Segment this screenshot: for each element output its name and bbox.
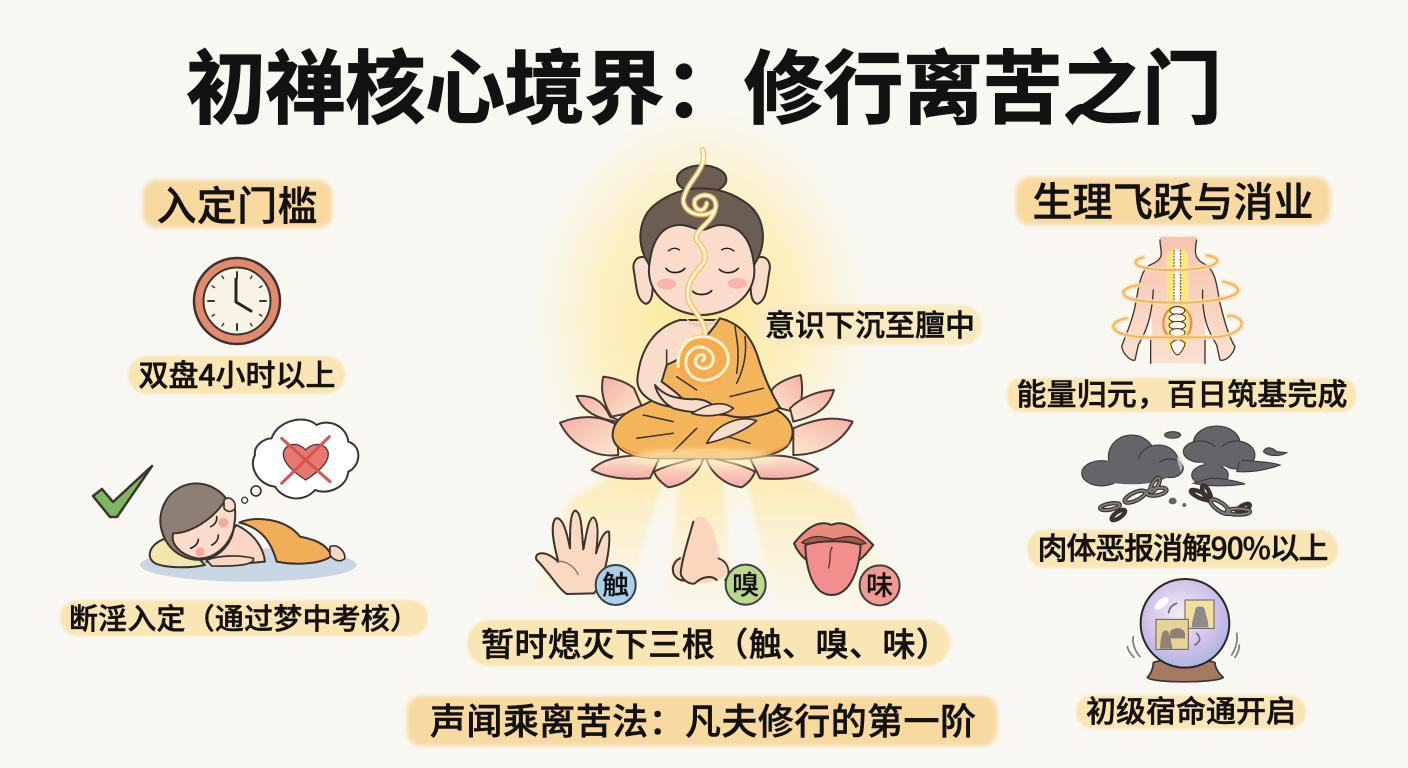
torso [637, 320, 727, 413]
ears [633, 257, 770, 304]
icon: dark clouds and broken chains [1082, 426, 1287, 522]
icon: spine with energy rings [1113, 237, 1242, 363]
icon: mouth and tongue: 味 [866, 564, 893, 603]
crossed foot [707, 419, 757, 443]
panel: physiological leap [1007, 170, 1356, 731]
central glow [525, 103, 905, 615]
panel: central figure [407, 150, 997, 746]
thought bubble [242, 420, 358, 503]
robe [239, 519, 332, 564]
icon: hand [536, 511, 636, 605]
shoulder [207, 525, 265, 565]
icon: mouth and tongue [794, 523, 900, 605]
title: 初禅核心境界：修行离苦之门 [186, 25, 1222, 141]
facial features [666, 248, 738, 294]
icon: sleeping monk with thought bubble [140, 420, 358, 582]
glow under legs [630, 449, 777, 468]
icon: check mark [93, 466, 152, 517]
label: extinguish lower three roots: 暂时熄灭下三根（触、嗅、味） [481, 618, 949, 666]
label: past-life insight: 初级宿命通开启 [1086, 687, 1296, 731]
label: energy returns: 能量归元，百日筑基完成 [1016, 370, 1348, 414]
callout: consciousness sinks: 意识下沉至膻中 [765, 301, 975, 345]
icon: nose: 嗅 [732, 563, 759, 602]
label: karma dissolved: 肉体恶报消解90%以上 [1038, 524, 1328, 568]
label: dream test: 断淫入定（通过梦中考核） [69, 596, 419, 638]
icon: hand: 触 [602, 564, 629, 603]
hair bun [677, 165, 726, 193]
hair [640, 188, 763, 265]
panel: entry threshold [60, 174, 428, 638]
lotus flower [560, 375, 853, 487]
icons: three senses [536, 511, 900, 605]
pillow [150, 539, 205, 567]
icon: crystal ball [1127, 579, 1239, 682]
arms and hands [655, 385, 714, 412]
icon: clock [194, 258, 280, 344]
meditating monk on lotus [560, 150, 853, 487]
energy stream and spirals [677, 150, 729, 387]
head [150, 473, 245, 570]
heading: physiological leap: 生理飞跃与消业 [1032, 170, 1314, 228]
face [649, 225, 754, 315]
legs and robe [613, 393, 793, 459]
icon: nose [671, 517, 766, 605]
heading: entry threshold: 入定门槛 [156, 174, 318, 232]
label: double lotus: 双盘4小时以上 [138, 351, 336, 395]
neck [685, 317, 719, 327]
footer banner: 声闻乘离苦法：凡夫修行的第一阶 [430, 693, 976, 745]
